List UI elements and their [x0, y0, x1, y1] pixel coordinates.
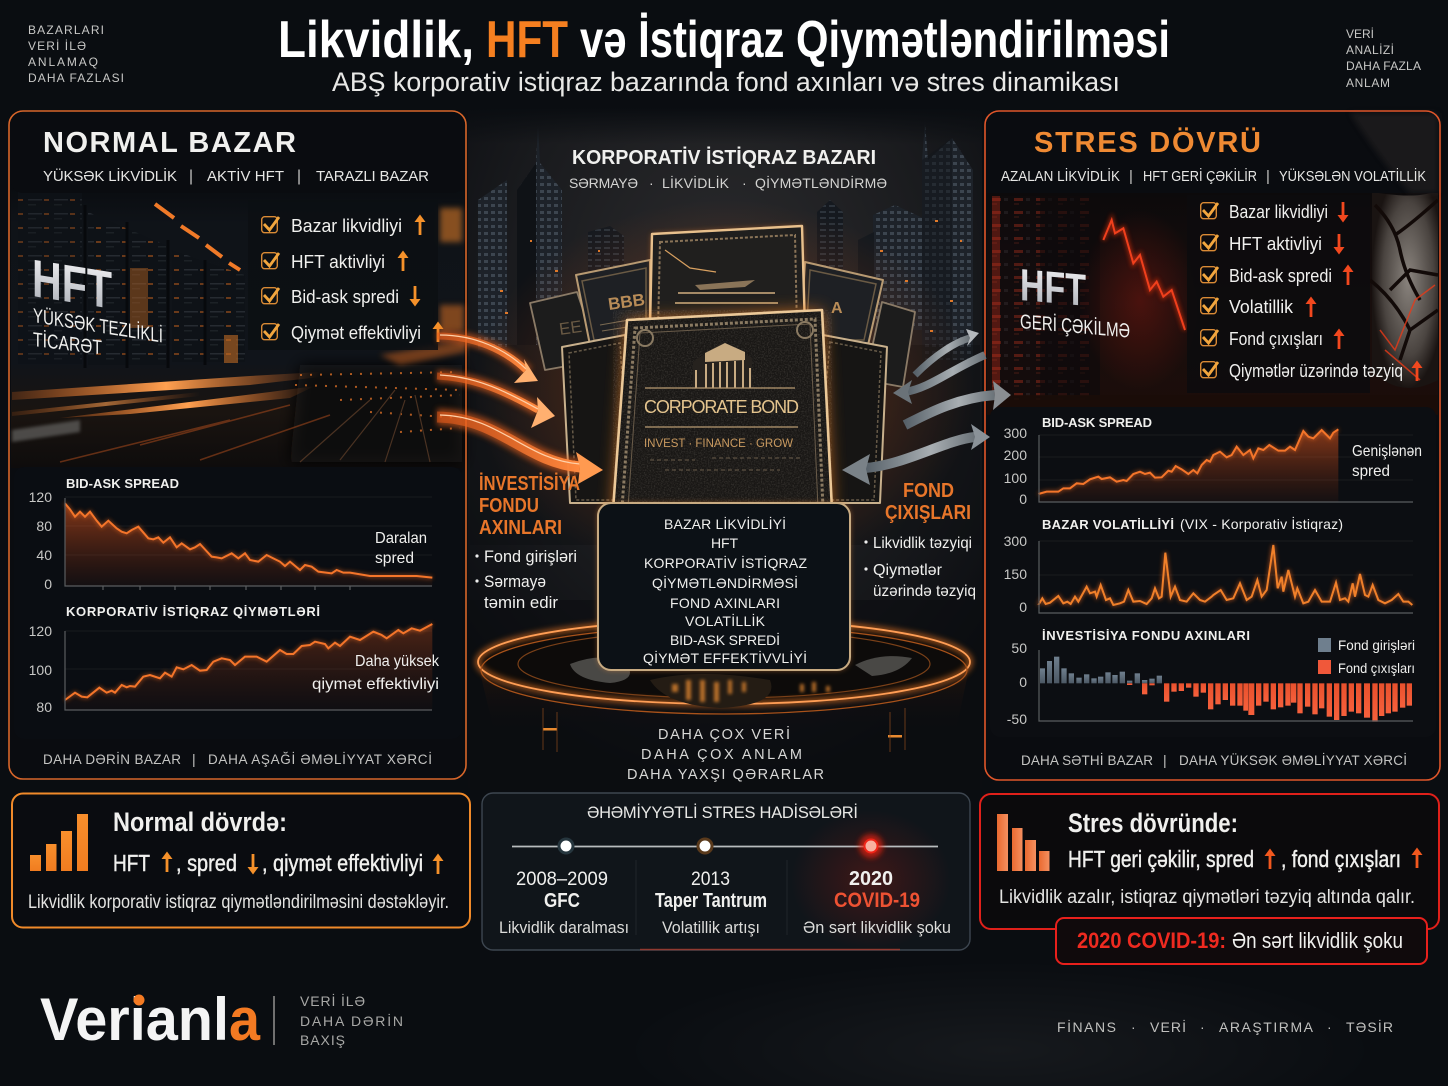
center box: key concepts: FOND AXINLARI [670, 595, 780, 611]
event: GFC [499, 839, 629, 937]
label: fund outflows: Qiymətlər [873, 562, 943, 579]
footer tags: · [1200, 1019, 1205, 1035]
chart: normal bid-ask spread: BID-ASK SPREAD [66, 476, 179, 491]
checklist: normal market: Bid-ask spredi [291, 286, 399, 307]
header tagline right: ANLAM [1346, 76, 1390, 90]
label: fund outflows: üzərində təzyiq [873, 583, 976, 600]
chart: stress bid-ask spread: 300 [1004, 425, 1027, 441]
checklist: normal market [262, 214, 444, 343]
chart: corporate bond prices: 120 [29, 623, 52, 639]
panel heading: normal market: NORMAL BAZAR [43, 127, 296, 159]
event: Taper Tantrum: 2013 [691, 869, 730, 890]
panel heading: stress period: YÜKSƏLƏN VOLATİLLİK [1279, 167, 1426, 185]
footer text: stress period: | [1163, 752, 1167, 768]
chart: investment fund flows: 50 [1011, 640, 1027, 656]
bond: front Corporate Bond: INVEST · FINANCE · GROW [644, 438, 793, 450]
chart: market volatility: 0 [1019, 599, 1027, 615]
chart: stress bid-ask spread: Genişlənən [1352, 443, 1422, 460]
panel heading: stress period: | [1266, 168, 1270, 185]
checklist: stress period: Fond çıxışları [1229, 329, 1323, 349]
chart: normal bid-ask spread: Daralan [375, 530, 427, 547]
label: investment fund flows: FONDU [479, 495, 539, 517]
chart: normal bid-ask spread: spred [375, 550, 414, 567]
chart: normal bid-ask spread: 0 [44, 576, 52, 592]
label: investment fund flows: AXINLARI [479, 517, 562, 539]
label: investment fund flows: Sərmayə [484, 573, 546, 591]
arrow: inflow 2 [437, 375, 555, 428]
panel heading: normal market [11, 113, 464, 193]
panel heading: stress period: HFT GERİ ÇƏKİLİR [1143, 167, 1257, 185]
top fade of scene [468, 108, 982, 144]
label: investment fund flows: İNVESTİSİYA [479, 472, 580, 495]
panel heading: stress period: STRES DÖVRÜ [1034, 126, 1261, 159]
chart: market volatility [1004, 515, 1413, 615]
event: Taper Tantrum [655, 839, 767, 937]
footer tags: VERİ [1150, 1018, 1186, 1035]
panel heading: normal market: | [189, 168, 193, 185]
callout: COVID-19 shock: Ən sərt likvidlik şoku [1232, 928, 1403, 953]
chart: stress bid-ask spread: 0 [1019, 491, 1027, 507]
checklist: normal market: HFT aktivliyi [291, 251, 385, 272]
footer tags: ARAŞTIRMA [1219, 1019, 1314, 1035]
chart: investment fund flows: -50 [1007, 711, 1027, 727]
title [278, 11, 1170, 69]
footer text: stress period [1021, 752, 1407, 768]
legend: fund flows [1318, 637, 1415, 676]
center box: key concepts: QİYMƏT EFFEKTİVVLİYİ [643, 649, 807, 666]
footer text: stress period: DAHA YÜKSƏK ƏMƏLİYYAT XƏRCİ [1179, 753, 1407, 768]
label: fund outflows: ÇIXIŞLARI [885, 502, 971, 524]
chart: investment fund flows: 0 [1019, 674, 1027, 690]
logo: Verianla: a [229, 986, 261, 1053]
event: Taper Tantrum: Volatillik artışı [662, 918, 760, 937]
logo: Verianla [40, 986, 403, 1053]
footer text: normal market [43, 751, 432, 767]
glow behind bonds [475, 200, 975, 580]
bond: BBB [576, 260, 650, 345]
label: fund outflows [864, 480, 976, 600]
chart: stress bid-ask spread: spred [1352, 463, 1390, 480]
header tagline left: BAZARLARI [28, 23, 104, 37]
center box: key concepts: BAZAR LİKVİDLİYİ [664, 515, 786, 532]
slogan: center: DAHA YAXŞI QƏRARLAR [627, 767, 824, 783]
event: GFC: Likvidlik daralması [499, 918, 629, 937]
callout: normal period: Likvidlik korporativ istiqraz qiymətləndirilməsini dəstəkləyir. [28, 892, 449, 913]
label: HFT high-frequency trading [32, 249, 163, 359]
header tagline right: VERİ [1346, 27, 1374, 41]
arrow: outflow 2 [893, 355, 985, 404]
bond: front Corporate Bond: CORPORATE BOND [644, 397, 799, 417]
callout: normal period: HFT [113, 850, 150, 876]
arrow: inflow 3 [437, 415, 603, 484]
footer tags: · [1327, 1019, 1332, 1035]
panel heading: normal market: YÜKSƏK LİKVİDLİK [43, 167, 177, 185]
panel heading: stress period [987, 113, 1438, 193]
chart: normal bid-ask spread: 80 [36, 518, 52, 534]
bond: far left: EE [558, 317, 583, 339]
heading: corporate bond market: · [742, 175, 747, 191]
left bottom glow of bond stage [470, 600, 980, 790]
header tagline right [1346, 27, 1421, 90]
arrow: outflow 4 [842, 424, 990, 485]
panel heading: normal market: TARAZLI BAZAR [316, 168, 429, 185]
footer tags: FİNANS [1057, 1018, 1116, 1035]
title: HFT [486, 11, 568, 69]
event: Taper Tantrum: Taper Tantrum [655, 890, 767, 912]
callout: stress period: HFT geri çəkilir, spred [1068, 846, 1254, 872]
legend: fund flows: Fond girişləri [1338, 637, 1415, 653]
event: COVID-19 [803, 834, 951, 937]
chart: investment fund flows: İNVESTİSİYA FONDU AXINLARI [1042, 628, 1250, 643]
chart: corporate bond prices: KORPORATİV İSTİQRAZ QİYMƏTLƏRİ [66, 604, 320, 619]
arrows: fund outflows [842, 329, 1011, 485]
chart: market volatility: 300 [1004, 533, 1027, 549]
arrows: fund inflows [437, 335, 603, 484]
callout: stress period: , fond çıxışları [1281, 846, 1401, 872]
footer text: normal market: DAHA AŞAĞİ ƏMƏLİYYAT XƏRCİ [208, 752, 432, 767]
chart: market volatility: (VIX - Korporativ İstiqraz) [1180, 515, 1343, 532]
checklist: normal market: Qiymət effektivliyi [291, 322, 421, 343]
callout: normal period [12, 794, 470, 928]
bond: mid right [810, 335, 887, 503]
bond: mid left [562, 335, 640, 503]
footer tags: TƏSİR [1346, 1018, 1393, 1035]
event: GFC: GFC [544, 890, 580, 912]
header tagline left: DAHA FAZLASI [28, 71, 124, 85]
label: HFT withdrawal: GERİ ÇƏKİLMƏ [1020, 310, 1130, 343]
panel heading: stress period: | [1129, 168, 1133, 185]
label: HFT withdrawal [1020, 259, 1130, 343]
chart: normal bid-ask spread: 40 [36, 547, 52, 563]
chart: stress bid-ask spread: BID-ASK SPREAD [1042, 415, 1152, 430]
checklist: stress period: Qiymətlər üzərində təzyiq [1229, 361, 1403, 381]
panel: stress period [985, 111, 1440, 780]
chart card background: normal [14, 467, 462, 739]
label: investment fund flows [475, 472, 580, 612]
footer text: normal market: | [192, 751, 196, 767]
checklist: stress period: HFT aktivliyi [1229, 234, 1322, 254]
icon: temple building [693, 342, 752, 388]
chart: market volatility: 150 [1004, 566, 1027, 582]
callout: stress period [980, 794, 1439, 964]
label: HFT high-frequency trading: HFT [32, 249, 112, 321]
panel: stress events timeline [482, 793, 970, 950]
panel heading: stress period: AZALAN LİKVİDLİK [1001, 167, 1120, 185]
center box: key concepts: HFT [711, 535, 738, 551]
checklist: stress period: Bid-ask spredi [1229, 266, 1332, 286]
chart: normal bid-ask spread: 120 [29, 489, 52, 505]
header tagline left: VERİ İLƏ [28, 39, 86, 53]
platform: glowing world map disc [478, 620, 970, 752]
legend: fund flows: Fond çıxışları [1338, 660, 1415, 676]
center box: key concepts: KORPORATİV İSTİQRAZ [644, 554, 807, 571]
chart: stress bid-ask spread: 100 [1004, 470, 1027, 486]
logo: Verianla: VERİ İLƏ [300, 992, 365, 1009]
bond: A [800, 262, 883, 345]
chart: corporate bond prices: 80 [36, 699, 52, 715]
heading: corporate bond market: · [649, 175, 654, 191]
footer text: normal market: DAHA DƏRİN BAZAR [43, 752, 181, 767]
slogan: center: DAHA ÇOX VERİ [658, 725, 790, 743]
bond: top back [650, 226, 805, 330]
chart: corporate bond prices: qiymət effektivliyi [312, 676, 439, 693]
bond: BBB: BBB [607, 290, 646, 314]
center box: key concepts: QİYMƏTLƏNDİRMƏSİ [652, 574, 798, 591]
bond: far right [865, 302, 915, 387]
callout: COVID-19 shock [1056, 918, 1427, 964]
heading: corporate bond market [569, 146, 887, 191]
header tagline right: DAHA FAZLA [1346, 59, 1421, 73]
checklist: stress period: Bazar likvidliyi [1229, 202, 1328, 222]
checklist: stress period: Volatillik [1229, 297, 1294, 317]
panel heading: normal market: AKTİV HFT [207, 167, 284, 185]
arrow: outflow 3 [905, 381, 1011, 425]
callout: stress period: Likvidlik azalır, istiqraz qiymətləri təzyiq altında qalır. [999, 887, 1415, 908]
heading: corporate bond market: SƏRMAYƏ [569, 175, 638, 191]
icon: falling bars [997, 814, 1050, 871]
title: Likvidlik, [278, 11, 474, 69]
event: COVID-19: COVID-19 [834, 889, 920, 912]
label: fund outflows: FOND [903, 480, 954, 502]
skyline: buildings [470, 122, 980, 545]
chart card background: stress [990, 407, 1436, 737]
event: COVID-19: 2020 [849, 868, 893, 890]
logo: Verianla: DAHA DƏRİN [300, 1012, 403, 1029]
heading: corporate bond market: KORPORATİV İSTİQRAZ BAZARI [572, 146, 876, 169]
header tagline right: ANALİZİ [1346, 43, 1394, 57]
logo: Verianla: Verianl [40, 986, 229, 1053]
bond: front Corporate Bond [613, 310, 832, 510]
logo: Verianla: BAXIŞ [300, 1032, 345, 1048]
callout: normal period: , spred [176, 850, 237, 876]
checklist: normal market: Bazar likvidliyi [291, 215, 402, 236]
chart: stress bid-ask spread: 200 [1004, 447, 1027, 463]
chart: investment fund flows [1007, 628, 1415, 727]
slogan: center: DAHA ÇOX ANLAM [641, 747, 802, 763]
title: və İstiqraz Qiymətləndirilməsi [580, 11, 1170, 69]
label: HFT high-frequency trading: YÜKSƏK TEZLİKLİ [33, 304, 163, 348]
HFT data center photo [11, 190, 466, 468]
bond: A: A [831, 300, 843, 317]
footer text: stress period: DAHA SƏTHİ BAZAR [1021, 753, 1153, 768]
panel: normal market [9, 111, 466, 779]
callout: normal period: Normal dövrdə: [113, 807, 287, 837]
icon: rising bars [30, 814, 88, 871]
bond: far left [530, 292, 600, 370]
callout: COVID-19 shock: 2020 COVID-19: [1077, 928, 1226, 953]
callout: normal period: , qiymət effektivliyi [262, 850, 423, 876]
label: HFT high-frequency trading: TİCARƏT [33, 328, 102, 359]
panel: stress events timeline: ƏHƏMİYYƏTLİ STRES HADİSƏLƏRİ [587, 803, 858, 822]
arrow: outflow 1 [915, 329, 979, 375]
label: HFT withdrawal: HFT [1020, 259, 1086, 316]
label: investment fund flows: Fond girişləri [484, 548, 577, 566]
HFT stress photo [987, 190, 1438, 415]
center box: key concepts: BID-ASK SPREDİ [670, 631, 780, 648]
callout: stress period: Stres dövründe: [1068, 808, 1238, 838]
header tagline left [28, 23, 124, 85]
panel border: normal [9, 111, 466, 779]
bonds stack [530, 226, 915, 510]
chart: market volatility: BAZAR VOLATİLLİYİ [1042, 517, 1174, 532]
slogan: center [627, 725, 824, 783]
label: fund outflows: Likvidlik təzyiqi [873, 535, 972, 552]
footer haze [620, 960, 1380, 1086]
center box: key concepts [598, 503, 850, 670]
panel: corporate bond market scene [468, 108, 982, 788]
checklist: stress period [1201, 202, 1422, 381]
footer tags [1057, 1018, 1393, 1035]
header tagline left: ANLAMAQ [28, 55, 98, 69]
panel heading: normal market: | [297, 168, 301, 185]
heading: corporate bond market: QİYMƏTLƏNDİRMƏ [755, 174, 887, 191]
arrow: inflow 1 [437, 335, 538, 383]
chart: normal bid-ask spread [29, 476, 432, 592]
center box: key concepts: VOLATİLLİK [685, 612, 766, 629]
chart: stress bid-ask spread [1004, 415, 1422, 507]
label: investment fund flows: təmin edir [484, 594, 559, 612]
footer tags: · [1131, 1019, 1136, 1035]
event: COVID-19: Ən sərt likvidlik şoku [803, 918, 951, 937]
chart: corporate bond prices [29, 604, 440, 715]
heading: corporate bond market: LİKVİDLİK [662, 174, 730, 191]
chart: corporate bond prices: Daha yüksek [355, 653, 440, 670]
chart: corporate bond prices: 100 [29, 662, 52, 678]
subtitle: ABŞ korporativ istiqraz bazarında fond axınları və stres dinamikası [332, 67, 1120, 97]
event: GFC: 2008–2009 [516, 869, 608, 890]
panel border: stress [985, 111, 1440, 780]
